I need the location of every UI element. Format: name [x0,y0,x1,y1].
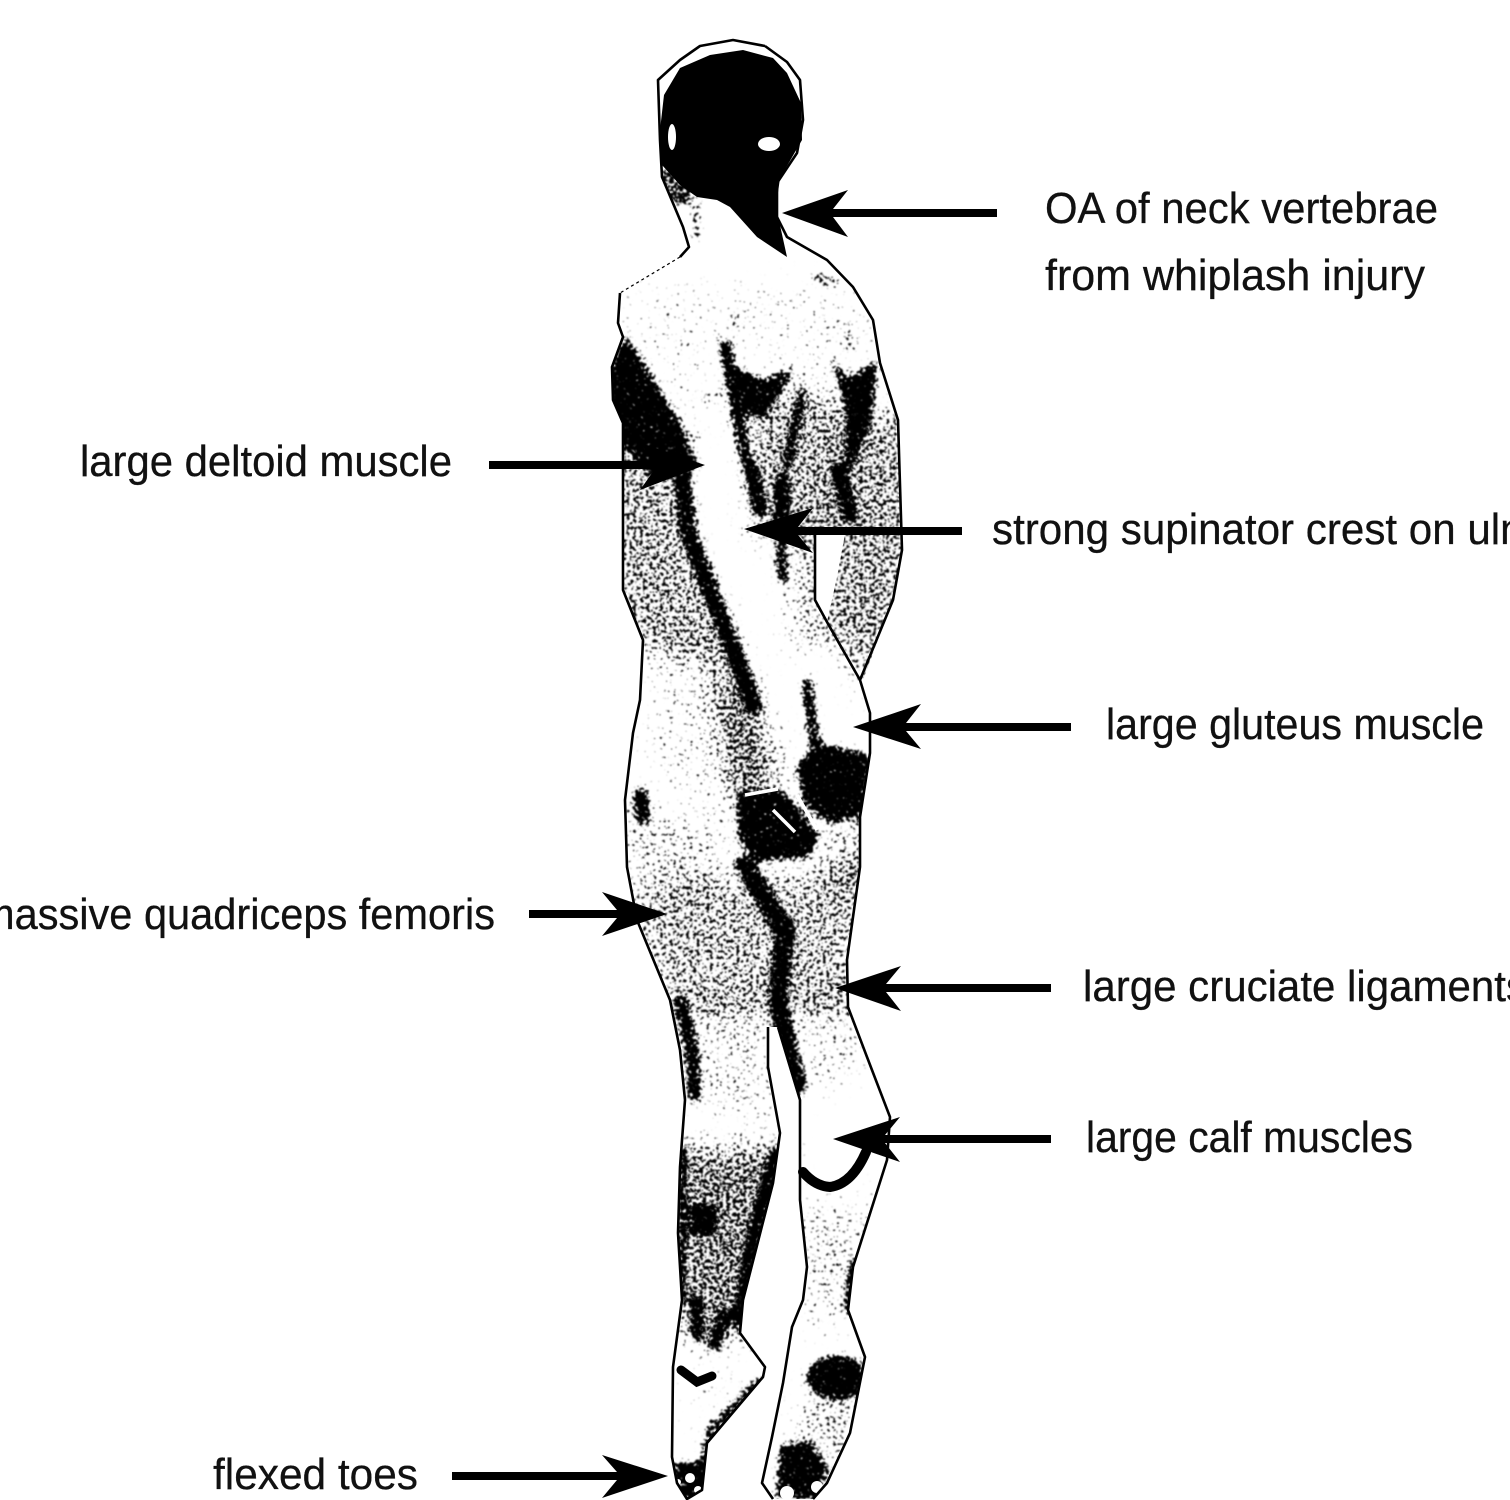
gluteal shadow [807,683,815,745]
text: toes label: flexed toes [213,1450,418,1499]
label: cruciate ligaments [835,962,1510,1011]
figure shading: stippled muscle shadows [605,165,915,1500]
label: deltoid [80,437,705,490]
label: toes [213,1450,668,1499]
hair [660,50,802,257]
faint shoulder line [620,257,680,293]
figure: standing nude seen from behind [605,40,915,1500]
hair highlight [668,124,676,150]
left hair and neck stipple [655,165,695,205]
label: calf [833,1113,1413,1162]
heel crease [681,1370,712,1382]
arrow: neck [782,190,997,237]
arrow: deltoid [489,443,705,490]
label: neck osteoarthritis [782,184,1438,300]
figure outline [612,40,902,1499]
foot shadows [703,1380,763,1468]
arrow: quadriceps [529,892,667,936]
waist edge beside the arm gap [815,534,860,680]
text: neck label: from whiplash injury [1045,251,1425,300]
label: quadriceps [0,890,667,939]
text: neck label: OA of neck vertebrae [1045,184,1438,233]
lower leg shadows [738,1155,775,1320]
label: supinator crest [744,505,1510,554]
hand shadow [735,788,820,862]
arrow: calf [833,1117,1051,1162]
text: deltoid label: large deltoid muscle [80,437,452,486]
arrow: cruciate ligaments [835,966,1051,1011]
white highlights on the hand and toes [745,789,817,832]
text: calf label: large calf muscles [1086,1113,1413,1162]
gap between arm and waist [815,534,845,622]
ear highlight [758,137,780,151]
label: gluteus [853,700,1484,749]
dark back and arm shadows [608,335,700,478]
arrow: supinator crest [744,508,962,553]
text: neck label [1045,184,1438,300]
calf crease [803,1152,866,1187]
thigh shadows [640,795,643,817]
arrow: gluteus [853,704,1071,749]
arrow: toes [452,1455,668,1498]
text: gluteus label: large gluteus muscle [1106,700,1484,749]
